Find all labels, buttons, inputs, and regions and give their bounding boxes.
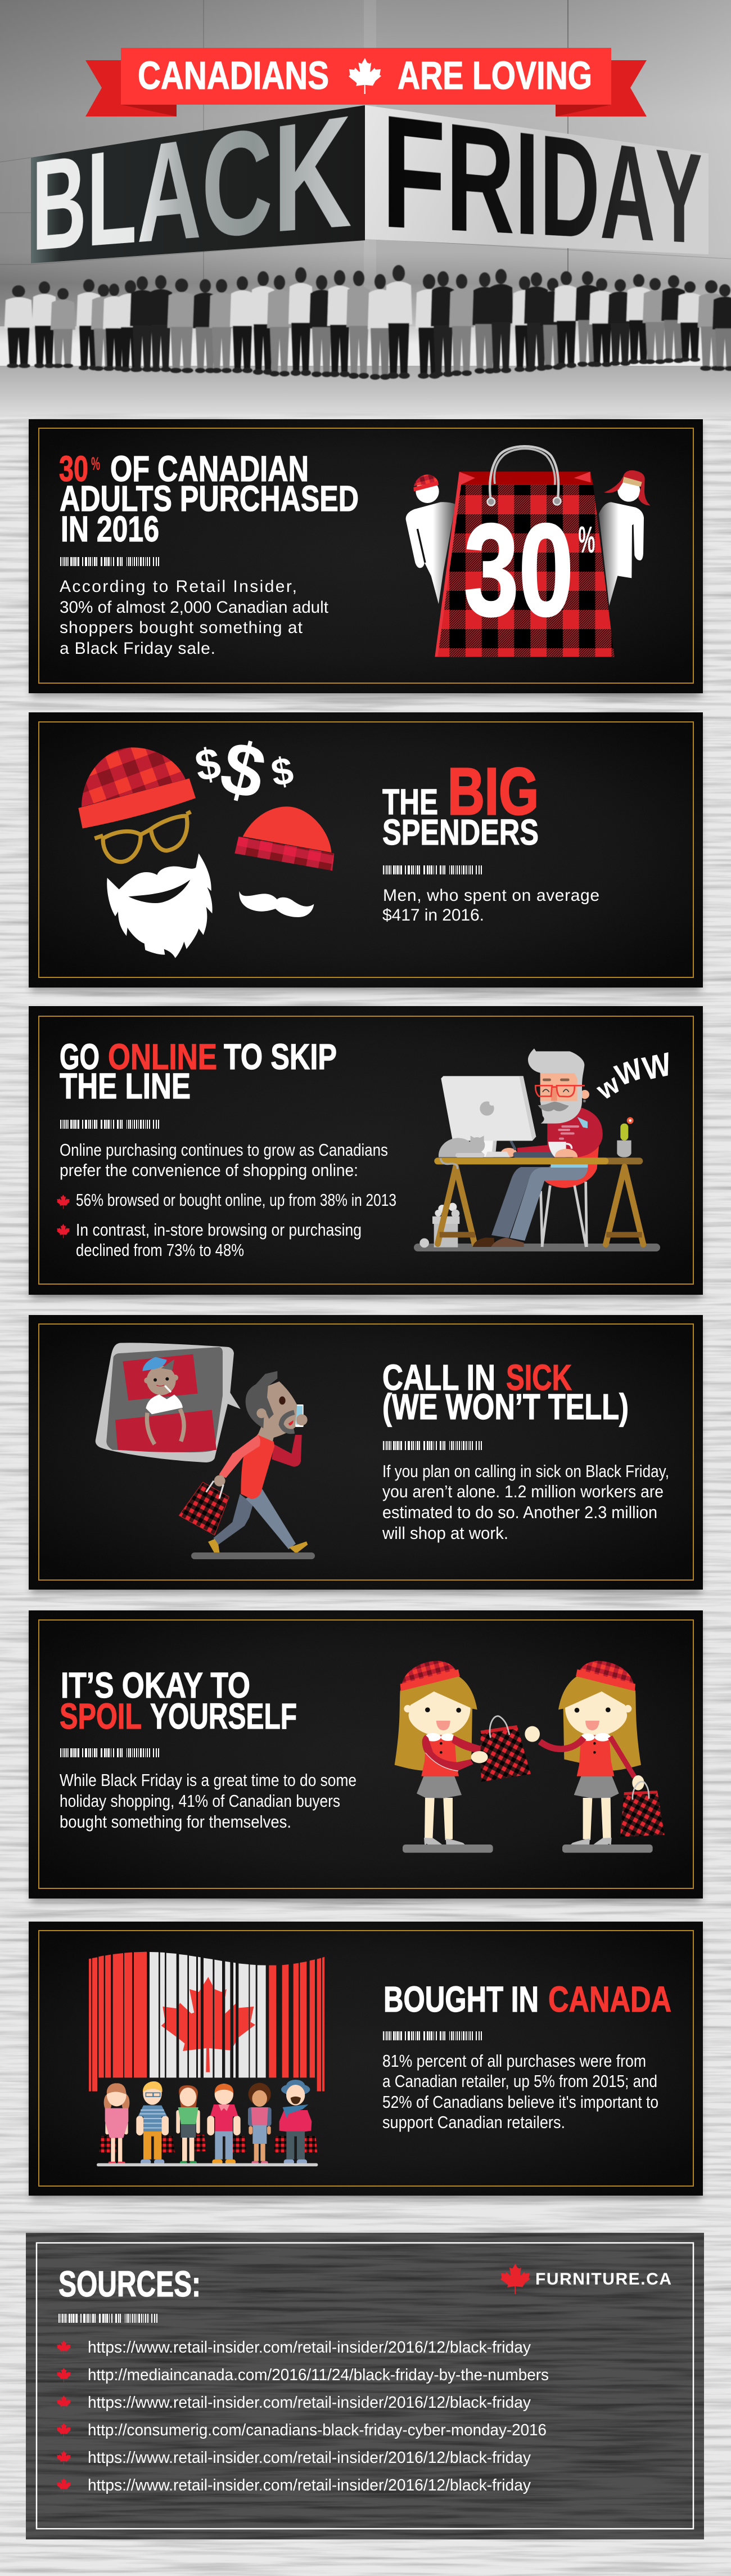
- icon: dollar signs: $: [213, 725, 273, 816]
- hero photo: storefront wall: [0, 0, 731, 383]
- ribbon: right tail: [556, 60, 647, 116]
- hero sign: light right face: [365, 105, 709, 254]
- floor: [414, 1244, 660, 1251]
- body text: $417 in 2016.: [382, 906, 484, 925]
- shopper: man in red polo: [207, 2084, 241, 2165]
- icon: plaid bag held out: [471, 1716, 531, 1782]
- ribbon heading: ARE LOVING: [398, 53, 592, 97]
- heading: the big spenders: [382, 755, 539, 852]
- body text: 30% of almost 2,000 Canadian adult: [60, 598, 329, 617]
- barcode divider: [60, 557, 159, 566]
- heading: it's okay to spoil yourself: [60, 1665, 297, 1736]
- source list: [57, 2339, 549, 2494]
- heading: go online to skip the line: THE LINE: [60, 1066, 191, 1106]
- ribbon heading: [121, 48, 611, 105]
- body text: Men, who spent on average: [383, 886, 599, 905]
- heading: 30% of Canadian adults purchased in 2016: 30: [59, 448, 88, 489]
- right shopper arms: [525, 1726, 644, 1790]
- desk top front: [434, 1157, 608, 1164]
- ribbon: left tail: [85, 60, 177, 116]
- body text: While Black Friday is a great time to do some: [60, 1770, 357, 1790]
- icon: hipster hats, glasses, beard and dollar signs: [78, 725, 334, 958]
- bullet: 56 percent browsed online: 56% browsed or bought online, up from 38% in 2013: [76, 1190, 396, 1210]
- source list: http://mediaincanada.com/2016/11/24/black-friday-by-the-numbers: [88, 2366, 549, 2384]
- icon: woman figure: [599, 470, 651, 606]
- man: legs and shoes: [208, 1489, 308, 1557]
- shopper bags: [99, 2135, 317, 2153]
- body text: According to Retail Insider,: [60, 577, 297, 596]
- body text: If you plan on calling in sick on Black Friday,: [382, 1461, 669, 1481]
- logo: Furniture.ca: [500, 2264, 671, 2294]
- body text: [382, 1461, 669, 1543]
- body text: [382, 886, 599, 925]
- body text: estimated to do so. Another 2.3 million: [382, 1502, 657, 1522]
- panel drop shadows: [31, 425, 701, 2200]
- heading: the big spenders: BIG: [448, 755, 539, 829]
- source list: https://www.retail-insider.com/retail-insider/2016/12/black-friday: [88, 2394, 531, 2412]
- hero sign lettering: BLACK: BLACK: [32, 82, 352, 278]
- illustration: man phoning in sick with speech bubble: [96, 1343, 315, 1559]
- body text: holiday shopping, 41% of Canadian buyers: [60, 1791, 340, 1811]
- heading: 30% of Canadian adults purchased in 2016: ADULTS PURCHASED: [60, 478, 359, 519]
- body text: Online purchasing continues to grow as Canadians: [60, 1140, 388, 1160]
- barcode divider: [383, 2031, 482, 2040]
- source list: http://consumerig.com/canadians-black-friday-cyber-monday-2016: [88, 2421, 547, 2439]
- icon: dollar signs: [192, 725, 296, 816]
- panel: go online to skip the line: [29, 1006, 703, 1295]
- body text: [60, 1770, 357, 1832]
- logo: Furniture.ca: FURNITURE.CA: [535, 2270, 671, 2288]
- text: www: w: [590, 1069, 625, 1106]
- body text: you aren’t alone. 1.2 million workers are: [382, 1482, 664, 1501]
- big number 30%: %: [578, 519, 595, 561]
- icon: computer monitor: [441, 1076, 536, 1157]
- body text: [60, 1140, 388, 1180]
- hero photo: crowd lining up: [4, 265, 731, 380]
- heading: 30% of Canadian adults purchased in 2016: [59, 448, 359, 549]
- source list: https://www.retail-insider.com/retail-insider/2016/12/black-friday: [88, 2449, 531, 2467]
- heading: 30% of Canadian adults purchased in 2016: IN 2016: [61, 509, 159, 549]
- heading: it's okay to spoil yourself: SPOIL: [60, 1696, 142, 1736]
- illustration: hipster at computer desk: [414, 1046, 675, 1251]
- heading: the big spenders: THE: [382, 782, 438, 822]
- bullet: in-store declined: declined from 73% to 48%: [76, 1240, 244, 1260]
- icon: plaid shopping bag with two shoppers: [406, 446, 651, 657]
- heading: bought in Canada: CANADA: [548, 1979, 671, 2019]
- man: body and arms: [214, 1434, 302, 1499]
- panel: call in sick: [29, 1315, 703, 1590]
- icon: dollar signs: $: [268, 749, 296, 795]
- panel: bought in Canada: [29, 1922, 703, 2196]
- floor: [191, 1552, 315, 1559]
- barcode divider: [60, 1120, 159, 1129]
- icon: white beard: [107, 854, 213, 958]
- hero sign: black left face: [31, 105, 365, 263]
- heading: call in sick, we won't tell: CALL IN: [382, 1357, 495, 1398]
- body text: a Black Friday sale.: [60, 639, 215, 658]
- barcode divider: [60, 1748, 159, 1757]
- shopper: girl in pink dress: [104, 2083, 129, 2164]
- panel: it's okay to spoil yourself: [29, 1610, 703, 1899]
- body text: 52% of Canadians believe it's important to: [382, 2092, 658, 2112]
- heading: call in sick, we won't tell: SICK: [506, 1357, 572, 1398]
- icon: plaid beanie: [78, 747, 196, 828]
- man: legs and shoes: [473, 1167, 588, 1247]
- source list: https://www.retail-insider.com/retail-insider/2016/12/black-friday: [88, 2339, 531, 2357]
- text: www: W: [639, 1046, 675, 1087]
- hero photo: pavement: [0, 366, 731, 419]
- icon: dollar signs: $: [192, 738, 224, 791]
- heading: 30% of Canadian adults purchased in 2016: OF CANADIAN: [110, 448, 309, 489]
- right shopper body: [558, 1661, 641, 1850]
- body text: support Canadian retailers.: [382, 2112, 565, 2132]
- heading: call in sick, we won't tell: [382, 1357, 629, 1427]
- heading: the big spenders: SPENDERS: [382, 812, 539, 852]
- heading: go online to skip the line: [60, 1036, 337, 1106]
- text: www: W: [611, 1052, 647, 1092]
- shopper: man in striped shirt: [136, 2081, 169, 2165]
- heading: bought in Canada: BOUGHT IN: [383, 1979, 539, 2019]
- icon: cat: [439, 1136, 485, 1169]
- desk: [434, 1157, 643, 1245]
- heading: go online to skip the line: ONLINE: [108, 1036, 217, 1077]
- body text: 81% percent of all purchases were from: [382, 2051, 646, 2071]
- shopper: woman with curly hair: [248, 2083, 272, 2164]
- big number 30%: 30: [464, 497, 574, 643]
- speech bubble: sick in bed: [96, 1343, 241, 1462]
- barcode divider: [58, 2314, 157, 2323]
- icon: plaid bag at side: [620, 1781, 665, 1837]
- bullet: in-store declined: In contrast, in-store browsing or purchasing: [76, 1220, 362, 1240]
- icon: man figure: [406, 474, 455, 604]
- man: head and phone: [246, 1371, 308, 1442]
- icon: bag body: [435, 446, 615, 657]
- man: head: [528, 1048, 589, 1124]
- heading: sources: SOURCES:: [58, 2264, 201, 2304]
- man: mug and hand: [548, 1142, 577, 1157]
- icon: gold glasses: [94, 812, 191, 862]
- floor: [97, 2163, 318, 2166]
- illustration: two shoppers exchanging a bag: [395, 1661, 665, 1853]
- icon: red beanie: [234, 806, 334, 870]
- ribbon heading: CANADIANS: [138, 53, 329, 97]
- heading: it's okay to spoil yourself: IT’S OKAY TO: [61, 1665, 250, 1706]
- barcode divider: [383, 1441, 482, 1450]
- heading: it's okay to spoil yourself: YOURSELF: [150, 1696, 297, 1736]
- body text: a Canadian retailer, up 5% from 2015; and: [382, 2071, 657, 2091]
- illustration: barcode flag and six shoppers: [89, 1952, 324, 2166]
- heading: go online to skip the line: GO: [60, 1036, 100, 1077]
- icon: moustache: [239, 891, 314, 917]
- heading: call in sick, we won't tell: (WE WON’T TELL): [382, 1386, 629, 1427]
- text: www: [590, 1046, 675, 1106]
- body text: bought something for themselves.: [60, 1812, 291, 1832]
- shopper: man in hat and scarf: [279, 2080, 312, 2165]
- panel: sources: [26, 2233, 704, 2539]
- source list: https://www.retail-insider.com/retail-insider/2016/12/black-friday: [88, 2476, 531, 2494]
- hero sign lettering: FRIDAY: FRIDAY: [381, 81, 702, 271]
- barcode divider: [383, 865, 482, 874]
- body text: shoppers bought something at: [60, 618, 303, 637]
- man: torso: [501, 1107, 603, 1168]
- icon: chair: [541, 1146, 599, 1247]
- panel: 30 percent of adults purchased: [29, 419, 703, 693]
- floor bases: [403, 1845, 653, 1853]
- body text: prefer the convenience of shopping online:: [60, 1160, 358, 1180]
- body text: [60, 577, 329, 658]
- body text: will shop at work.: [382, 1523, 508, 1543]
- icon: cactus: [617, 1117, 634, 1157]
- left shopper arms: [422, 1735, 482, 1771]
- icon: plaid shopping bag: [179, 1481, 229, 1535]
- panel: the big spenders: [29, 712, 703, 988]
- bullet: in-store declined: [57, 1220, 362, 1260]
- body text: [382, 2051, 658, 2132]
- icon: waste bin: [419, 1203, 459, 1247]
- barcode flag of Canada: [89, 1952, 324, 2092]
- heading: 30% of Canadian adults purchased in 2016: %: [91, 454, 100, 474]
- heading: go online to skip the line: TO SKIP: [224, 1036, 337, 1077]
- shopper: woman in green top: [176, 2085, 200, 2165]
